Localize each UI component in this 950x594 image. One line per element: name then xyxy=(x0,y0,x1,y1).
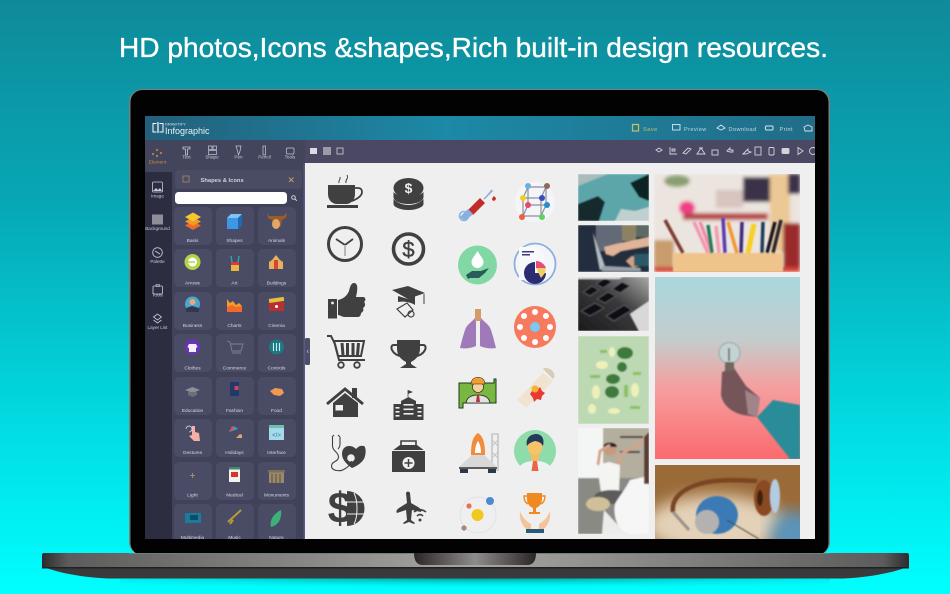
icon: cube network xyxy=(515,182,555,222)
preview button xyxy=(672,124,706,131)
tile labels: Light xyxy=(187,492,198,498)
account icon xyxy=(804,125,812,131)
base upper deck xyxy=(42,553,909,567)
tile labels: Music xyxy=(228,535,241,541)
download button: Download xyxy=(728,127,757,133)
pen tool: Pen xyxy=(234,154,243,160)
search box xyxy=(175,192,297,204)
tile icons xyxy=(184,212,287,527)
icon: graduation cap xyxy=(392,286,425,317)
photo: light bulb xyxy=(655,277,800,459)
text tool xyxy=(182,147,191,160)
icon: shapes xyxy=(227,214,242,229)
laptop mockup xyxy=(42,89,909,592)
icon: light xyxy=(190,473,195,478)
palette tab xyxy=(150,248,165,264)
icon: airplane wifi xyxy=(396,492,426,524)
icon: house xyxy=(327,388,363,417)
tools tool xyxy=(285,148,296,160)
tile labels: Business xyxy=(183,323,203,329)
tile labels: Nature xyxy=(269,535,284,541)
save button xyxy=(632,124,658,133)
tile labels: Cinema xyxy=(268,323,285,329)
laptop base xyxy=(42,553,909,592)
icon: cinema xyxy=(269,297,284,311)
image tab: Image xyxy=(151,194,164,198)
dark icon grid xyxy=(327,175,426,533)
icon: animals xyxy=(267,213,287,229)
tile labels: Multimedia xyxy=(181,535,204,541)
tile labels: Holidays xyxy=(225,450,244,456)
panel collapse handle xyxy=(305,338,310,365)
icon: monuments xyxy=(268,470,285,483)
print button: Print xyxy=(780,127,793,133)
element tab xyxy=(149,149,166,164)
title: HD photos,Icons &shapes,Rich built-in design resources. xyxy=(119,32,828,63)
tile labels: Education xyxy=(182,408,203,414)
icon: basis xyxy=(185,212,201,230)
right toolbar icons xyxy=(656,147,816,155)
pen tool xyxy=(234,146,242,158)
tools tab xyxy=(152,284,164,298)
icon: commerce xyxy=(227,341,243,353)
icon: dollar globe xyxy=(328,484,364,533)
icon: trophy xyxy=(391,340,426,368)
pencil tool xyxy=(258,146,271,160)
tile labels: Monuments xyxy=(264,492,290,498)
tile labels: Commerce xyxy=(223,366,247,372)
laptop lid bezel xyxy=(129,89,830,555)
photo: glass buildings xyxy=(578,174,649,221)
icon: medical kit xyxy=(392,441,425,472)
icon: nature xyxy=(271,510,281,527)
icon: interface: </> xyxy=(272,433,281,439)
icon: business xyxy=(185,296,200,312)
photo: laptop hands xyxy=(578,225,649,272)
tools tab: Tools xyxy=(152,292,164,298)
colour icon grid xyxy=(458,182,556,533)
tile labels: Art xyxy=(231,280,238,286)
canvas toolbar xyxy=(305,140,816,163)
tile labels: Interface xyxy=(267,450,286,456)
icon: engineer blueprint xyxy=(459,377,496,408)
icon: diploma scroll xyxy=(517,368,554,408)
icon: stethoscope heart xyxy=(332,435,366,471)
logo: DRAWTIFY xyxy=(165,122,186,126)
icon tiles xyxy=(174,207,296,542)
icon: fashion xyxy=(230,382,239,396)
icon: solar system xyxy=(460,497,496,533)
icon: coral wheel xyxy=(514,306,556,348)
icon: syringe xyxy=(460,190,496,220)
tile labels: Shapes xyxy=(226,238,243,244)
icon: interface xyxy=(269,425,284,440)
save button: Save xyxy=(643,127,658,133)
icon: dollar coin xyxy=(394,234,424,264)
icon: holidays xyxy=(229,426,242,438)
palette tab: Palette xyxy=(150,259,165,264)
tile labels: Charts xyxy=(227,323,242,329)
logo: Infographic xyxy=(165,126,210,136)
icon: shopping cart xyxy=(327,336,365,368)
icon: controls xyxy=(269,340,284,354)
icon: businessman avatar xyxy=(514,430,556,472)
photo: keyboard xyxy=(578,277,649,331)
preview button: Preview xyxy=(684,127,707,133)
print button xyxy=(765,126,792,131)
tile labels: Gestures xyxy=(183,450,203,456)
tile labels: Basis xyxy=(187,238,199,244)
background tab: Background xyxy=(145,226,170,231)
icon: medical xyxy=(229,467,240,482)
icon: lungs xyxy=(460,309,496,348)
left tool strip xyxy=(145,140,305,172)
base notch xyxy=(414,553,536,565)
icon: music xyxy=(228,510,241,524)
icon: clock xyxy=(328,228,362,260)
tile labels: Arrows xyxy=(185,280,201,286)
icon: dollar globe: $ xyxy=(328,484,352,533)
shape tool: Shape xyxy=(205,154,219,160)
icon: water drop hand xyxy=(458,246,497,284)
icon: buildings xyxy=(269,255,283,269)
icon: art xyxy=(231,256,239,271)
pencil tool: Pencil xyxy=(258,154,271,160)
tools tool: Tools xyxy=(285,154,296,160)
icon: gestures xyxy=(186,426,200,441)
app screen xyxy=(145,116,820,559)
icon: document pie xyxy=(514,244,556,284)
icon: coffee cup xyxy=(327,175,362,208)
panel header xyxy=(175,172,302,189)
icon: arrows xyxy=(184,254,200,270)
icon: space shuttle xyxy=(459,433,498,473)
icon: clothes xyxy=(185,340,200,354)
layer list tab xyxy=(148,314,168,330)
text tool: Text xyxy=(182,154,191,160)
canvas xyxy=(305,163,815,539)
icon: multimedia xyxy=(185,513,201,523)
panel: shapes and icons xyxy=(172,163,305,542)
icon: food xyxy=(270,388,284,396)
photo: pencils xyxy=(654,174,800,272)
photo: yoga xyxy=(578,428,649,534)
shape tool xyxy=(205,146,219,160)
photo: green vegetables xyxy=(578,336,649,424)
icon: dollar coin: $ xyxy=(402,237,415,262)
tile labels: Food xyxy=(271,408,282,414)
tile labels: Clothes xyxy=(184,366,201,372)
photo grid gap strip xyxy=(800,163,815,539)
panel header: Shapes & Icons xyxy=(200,178,244,184)
base shadow xyxy=(120,578,830,592)
layer list tab: Layer List xyxy=(148,325,168,330)
icon: charts xyxy=(227,299,242,312)
icon: trophy in hands xyxy=(520,493,550,533)
image tab xyxy=(151,182,164,198)
tile labels: Medical xyxy=(226,492,243,498)
element tab: Element xyxy=(149,160,167,166)
logo xyxy=(153,122,210,136)
background tab xyxy=(145,214,170,231)
tile labels xyxy=(181,238,290,541)
tile labels: Animals xyxy=(268,238,286,244)
tile labels: Controls xyxy=(268,366,286,372)
photo grid xyxy=(578,163,820,559)
download button xyxy=(716,124,756,131)
photo: headphones xyxy=(645,465,820,559)
icon: school xyxy=(394,390,424,420)
app header bar xyxy=(145,116,815,140)
tile labels: Buildings xyxy=(267,280,287,286)
base lower body xyxy=(42,566,909,578)
left sidebar xyxy=(145,172,172,539)
tile labels: Fashion xyxy=(226,408,243,414)
icon: education xyxy=(185,387,200,397)
icon: coin stack: $ xyxy=(405,180,413,196)
icon: thumbs up xyxy=(328,283,365,318)
icon: coin stack xyxy=(394,178,424,210)
